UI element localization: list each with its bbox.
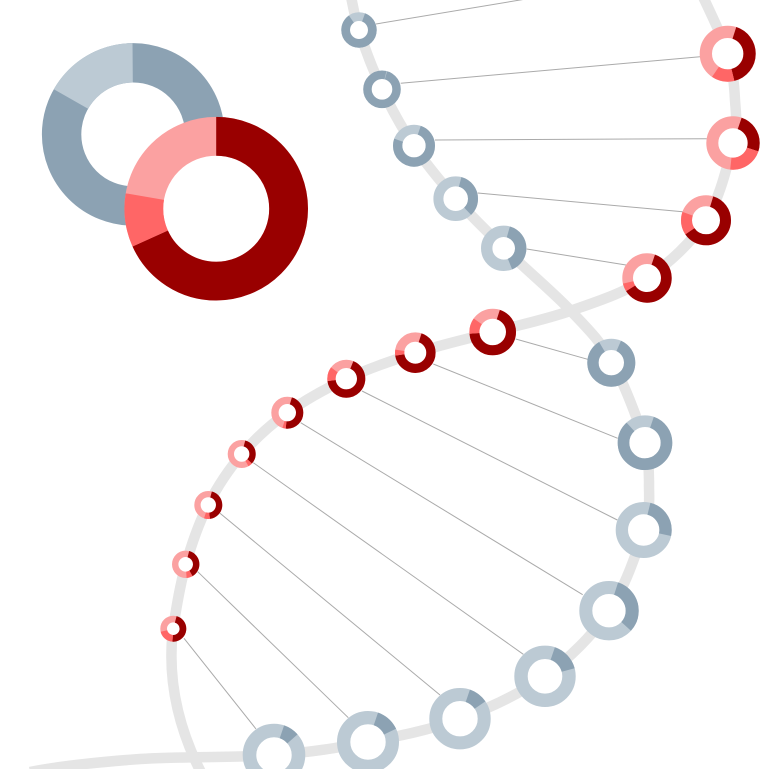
donut: red 8 bbox=[275, 400, 300, 425]
red series donuts bbox=[164, 32, 754, 638]
donut: red 2 bbox=[712, 122, 754, 164]
donut: blue 8 bbox=[622, 508, 666, 552]
donut: red 5 bbox=[474, 314, 511, 350]
donut: blue 5 bbox=[487, 231, 521, 265]
donut: blue 4 bbox=[438, 181, 473, 216]
strand: red series backbone bbox=[171, 0, 736, 769]
blue series donuts bbox=[250, 17, 666, 769]
donut: red 1 bbox=[706, 32, 750, 76]
donut: blue 11 bbox=[436, 694, 484, 743]
donut: blue 9 bbox=[586, 588, 632, 634]
donut: blue 12 bbox=[344, 718, 392, 766]
donut: red 11 bbox=[175, 554, 196, 575]
donut: red 9 bbox=[231, 443, 253, 465]
donut: blue 13 bbox=[250, 730, 298, 769]
donut: red 3 bbox=[686, 201, 726, 240]
large donut: red legend bbox=[144, 136, 289, 281]
donut: blue 1 bbox=[346, 17, 372, 43]
donut: red 7 bbox=[331, 364, 361, 394]
donut: red 10 bbox=[197, 494, 219, 516]
donut: blue 3 bbox=[398, 129, 430, 162]
donut: blue 7 bbox=[624, 421, 666, 464]
connecting lines between strands bbox=[184, 0, 707, 729]
donut: red 4 bbox=[628, 259, 666, 297]
donut: blue 6 bbox=[593, 344, 630, 381]
donut: red 6 bbox=[400, 337, 431, 368]
donut: blue 2 bbox=[367, 75, 397, 104]
donut: blue 10 bbox=[521, 652, 569, 700]
large donut: blue legend bbox=[62, 63, 205, 206]
donut: red 12 bbox=[164, 619, 183, 638]
